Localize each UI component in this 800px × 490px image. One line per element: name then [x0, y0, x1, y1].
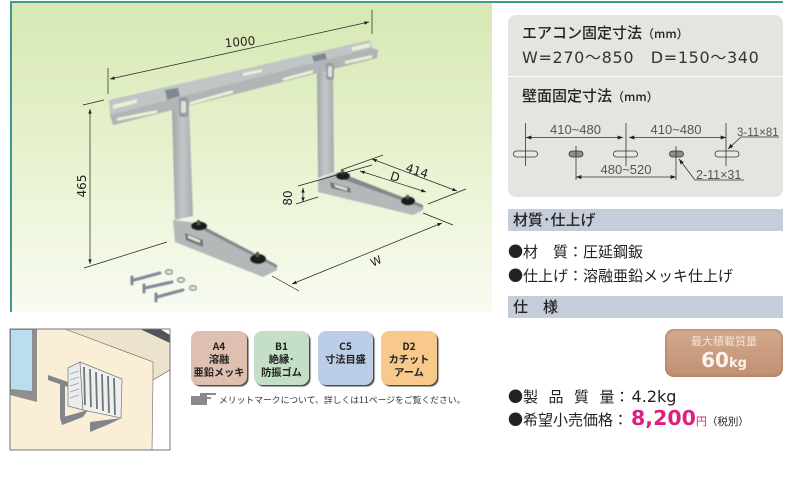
text: material: ●材 質：圧延鋼鈑	[508, 241, 643, 262]
badge: C5: 寸法目盛	[325, 351, 366, 366]
heading: material and finish: 材質･仕上げ	[513, 209, 596, 230]
badge: B1: B1	[275, 338, 288, 353]
label: maximum load: 最大積載質量	[691, 333, 757, 349]
diagram: wall fixing holes: 2-11×31	[696, 168, 741, 182]
panel: fixing dimensions	[508, 15, 783, 197]
diagram: wall fixing holes: 410~480	[550, 122, 601, 137]
diagram: wall fixing holes: 3-11×81	[737, 127, 779, 139]
badge: B1	[254, 331, 309, 385]
heading: specifications	[508, 296, 783, 318]
badge: maximum load	[665, 329, 783, 377]
badge: B1: 防振ゴム	[261, 364, 302, 379]
heading: specifications: 仕 様	[513, 296, 558, 317]
badge: C5: C5	[339, 338, 352, 353]
badge: D2: カチット	[389, 351, 429, 366]
diagram: wall fixing holes: 410~480	[651, 122, 701, 137]
badge: A4: A4	[213, 338, 225, 353]
diagram: wall fixing holes: 480~520	[601, 162, 651, 177]
heading: air conditioner fixing dimensions: エアコン固定寸法（mm）	[522, 22, 689, 43]
badge: B1: 絶縁･	[269, 351, 294, 366]
text: suggested retail price: ●希望小売価格：8,200円（税別）	[508, 406, 749, 430]
panel: product photo with dimensions: 465	[75, 175, 89, 197]
badge: C5	[318, 331, 373, 385]
text: W and D ranges: W=270～850 D=150～340	[522, 48, 759, 67]
panel: product photo with dimensions: 80	[281, 190, 295, 206]
panel: product photo with dimensions: 414	[404, 161, 430, 181]
divider: dimension sections	[508, 76, 783, 77]
badge: D2	[381, 331, 437, 385]
panel: product photo with dimensions: W	[369, 253, 384, 270]
badge: A4: 溶融	[209, 351, 229, 366]
badge: D2: D2	[402, 338, 416, 353]
panel: product photo with dimensions: D	[388, 169, 402, 185]
badge: A4: 亜鉛メッキ	[194, 364, 244, 379]
text: product weight: ●製品質量：4.2kg	[508, 386, 676, 407]
badge: D2: アーム	[394, 364, 424, 379]
text: finish: ●仕上げ：溶融亜鉛メッキ仕上げ	[508, 265, 733, 286]
badge: A4	[191, 331, 247, 385]
value: 60 kg: 60kg	[701, 348, 747, 372]
heading: wall fixing dimensions: 壁面固定寸法（mm）	[522, 85, 659, 106]
note: merit mark explanation: メリットマークについて、詳しくは11ページをご覧ください。	[219, 393, 465, 406]
panel: product photo with dimensions: 1000	[224, 34, 256, 50]
heading: material and finish	[508, 209, 783, 231]
